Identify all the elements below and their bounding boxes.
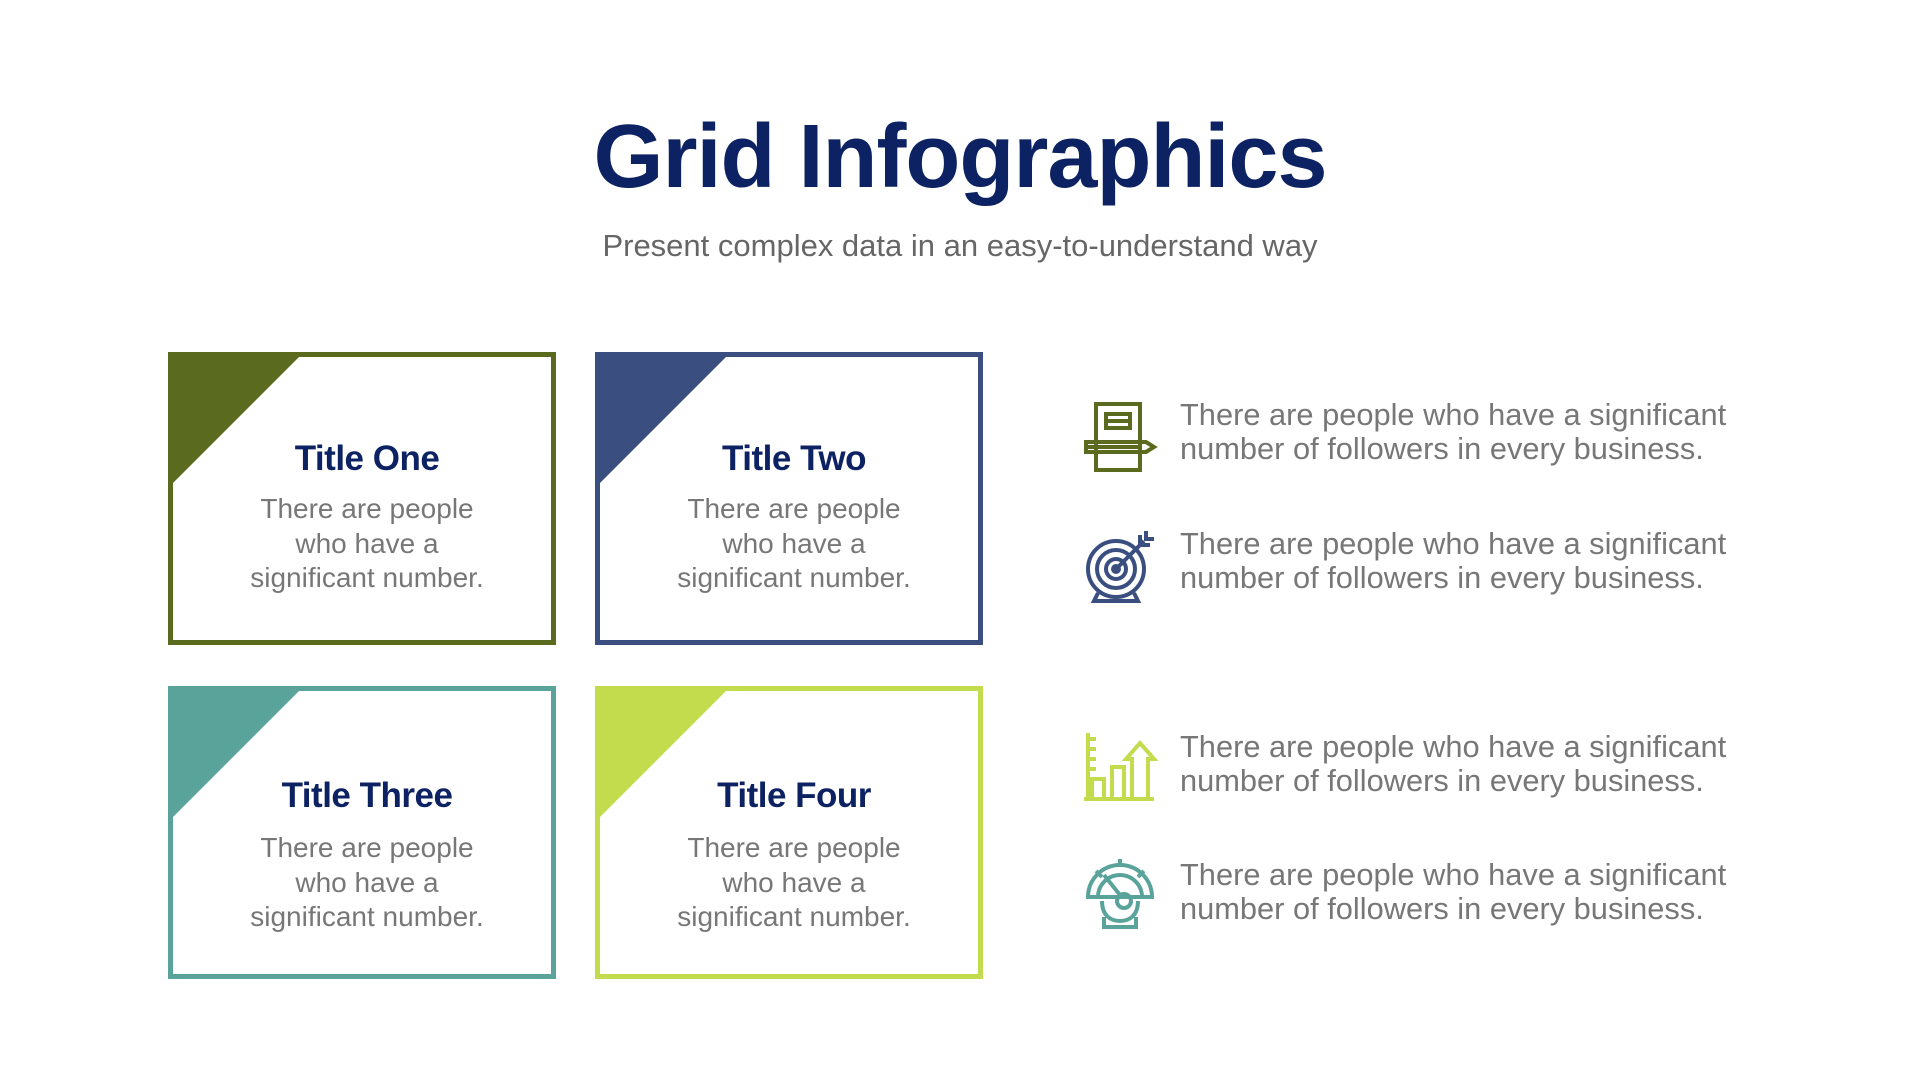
- text 1: [1180, 397, 1726, 466]
- panel: title one: significant number.: [250, 562, 484, 593]
- panel: title one: who have a: [295, 528, 439, 558]
- text 3: [1180, 729, 1726, 798]
- text 1: number of followers in every business.: [1180, 431, 1704, 466]
- panel: title three: [168, 686, 556, 979]
- panel: title two: Title Two: [722, 439, 866, 478]
- title: Grid Infographics: [593, 107, 1327, 207]
- panel: title four: There are people: [687, 832, 901, 863]
- panel: title three: Title Three: [282, 776, 452, 815]
- icon: chart: [1084, 733, 1158, 801]
- panel: title three: There are people: [260, 832, 474, 863]
- panel: title three: who have a: [295, 866, 439, 898]
- text 2: [1180, 526, 1726, 595]
- text 2: There are people who have a significant: [1180, 526, 1726, 561]
- text 4: [1180, 857, 1726, 926]
- text 1: There are people who have a significant: [1180, 397, 1726, 432]
- panel: title one: There are people: [260, 493, 474, 524]
- text 3: There are people who have a significant: [1180, 729, 1726, 764]
- panel: title two: significant number.: [677, 562, 911, 593]
- icon: gauge: [1086, 859, 1154, 929]
- text 4: number of followers in every business.: [1180, 891, 1704, 926]
- panel: title four: who have a: [722, 866, 866, 898]
- icon: target: [1086, 531, 1154, 603]
- subtitle: Present complex data in an easy-to-understand way: [602, 228, 1318, 263]
- panel: title four: significant number.: [677, 901, 911, 932]
- panel: title three: significant number.: [250, 901, 484, 932]
- panel: title two: who have a: [722, 528, 866, 558]
- text 3: number of followers in every business.: [1180, 763, 1704, 798]
- text 4: There are people who have a significant: [1180, 857, 1726, 892]
- panel: title four: [595, 686, 983, 979]
- panel: title four: Title Four: [717, 776, 871, 815]
- panel: title two: There are people: [687, 493, 901, 524]
- panel: title one: Title One: [295, 439, 439, 478]
- panel: title two: [595, 352, 983, 645]
- icon: book: [1084, 402, 1158, 472]
- text 2: number of followers in every business.: [1180, 560, 1704, 595]
- panel: title one: [168, 352, 556, 645]
